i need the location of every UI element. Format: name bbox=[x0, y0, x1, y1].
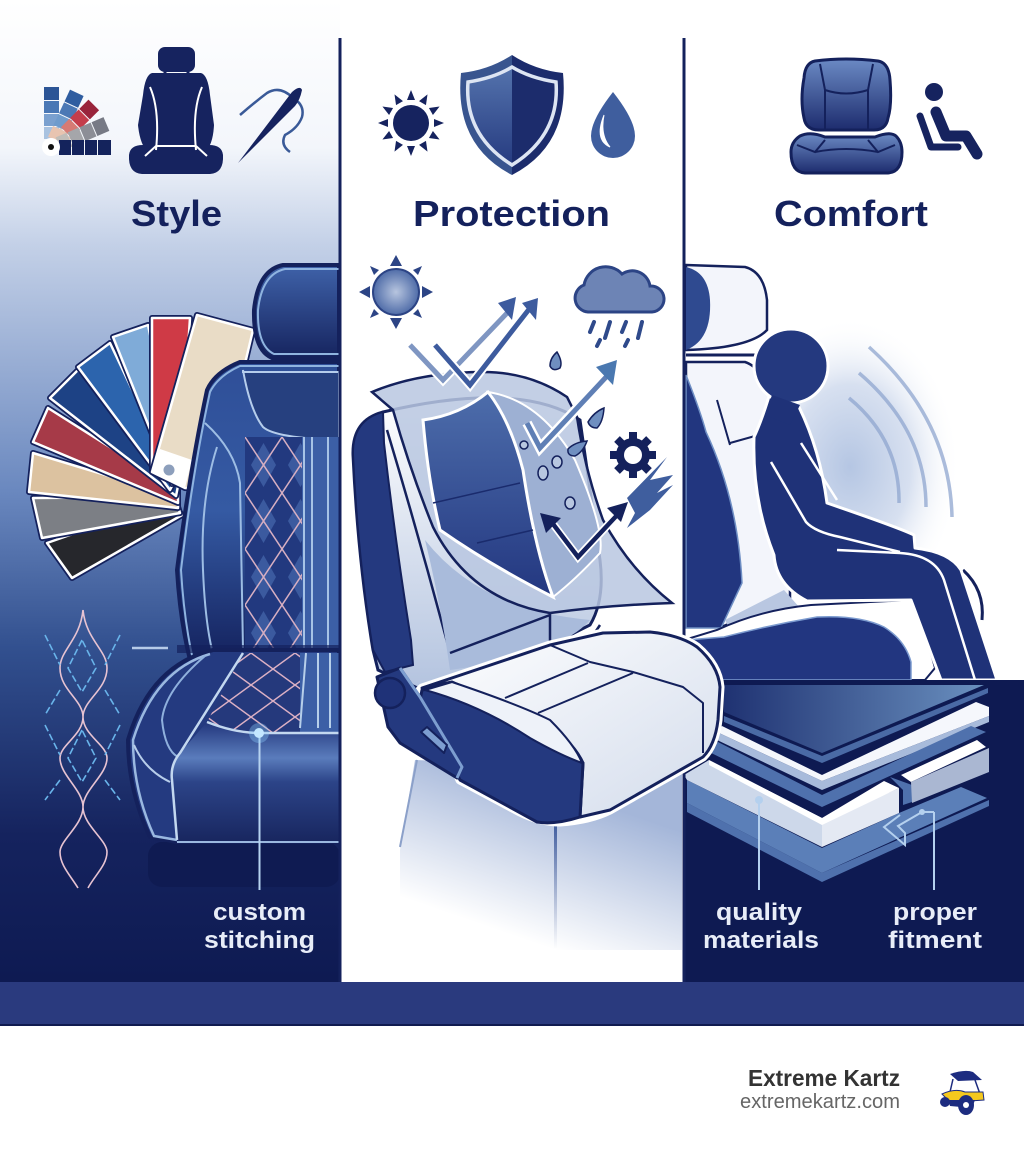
footer brand text: Extreme Kartz bbox=[748, 1065, 900, 1091]
heading: comfort: Comfort bbox=[774, 193, 928, 234]
seat: protection backrest bbox=[353, 398, 601, 690]
icon: gear bbox=[610, 432, 656, 478]
icon: cushion seat bbox=[791, 59, 902, 173]
icon: sun bbox=[378, 90, 444, 156]
footer brand text bbox=[740, 1065, 900, 1113]
label: quality materials: materials bbox=[703, 927, 819, 954]
seat: cushion bbox=[128, 650, 340, 887]
footer brand text: extremekartz.com bbox=[740, 1091, 900, 1113]
icon: seated person bbox=[920, 83, 977, 154]
callout lines: comfort bbox=[755, 796, 934, 890]
panel: comfort bbox=[683, 0, 1024, 982]
label: custom stitching: stitching bbox=[204, 927, 315, 954]
label: quality materials bbox=[703, 899, 819, 954]
label: proper fitment: fitment bbox=[888, 927, 982, 954]
seat: comfort bbox=[684, 265, 982, 680]
label: custom stitching: custom bbox=[213, 899, 306, 926]
seat: backrest bbox=[177, 362, 339, 660]
label: proper fitment: proper bbox=[893, 899, 977, 926]
seat: headrest bbox=[254, 265, 339, 362]
seat: protection cushion bbox=[375, 632, 720, 823]
arrows and water drops bbox=[410, 297, 628, 557]
icon: needle and thread bbox=[238, 88, 303, 163]
icon: shield bbox=[460, 55, 564, 175]
silhouette: seated person bbox=[754, 329, 997, 680]
under-seat shadow bbox=[400, 760, 682, 950]
motion glow bbox=[740, 317, 960, 617]
material fan bbox=[29, 315, 253, 578]
label: proper fitment bbox=[888, 899, 982, 954]
callout line: stitching bbox=[132, 648, 269, 890]
motion arcs bbox=[849, 347, 952, 517]
base block bbox=[683, 680, 1024, 982]
heading: protection: Protection bbox=[413, 193, 610, 234]
icon: seat bbox=[129, 47, 223, 174]
protective sheet bbox=[372, 372, 672, 613]
material layers bbox=[684, 685, 989, 882]
heading: style: Style bbox=[131, 193, 222, 234]
motion streak bbox=[627, 457, 673, 528]
label: quality materials: quality bbox=[716, 899, 803, 926]
icon: golf kart logo bbox=[940, 1071, 984, 1115]
icon: weather sun bbox=[359, 255, 433, 329]
icon: rain cloud bbox=[575, 267, 664, 346]
icon: colour swatch fan bbox=[42, 87, 111, 156]
stitching pattern bbox=[45, 610, 120, 888]
panel: protection bbox=[342, 0, 720, 982]
panel dividers bbox=[340, 38, 684, 982]
label: custom stitching bbox=[204, 899, 315, 954]
icon: water drop bbox=[591, 92, 635, 158]
panel: style bbox=[0, 0, 340, 982]
bottom band bbox=[0, 982, 1024, 1026]
